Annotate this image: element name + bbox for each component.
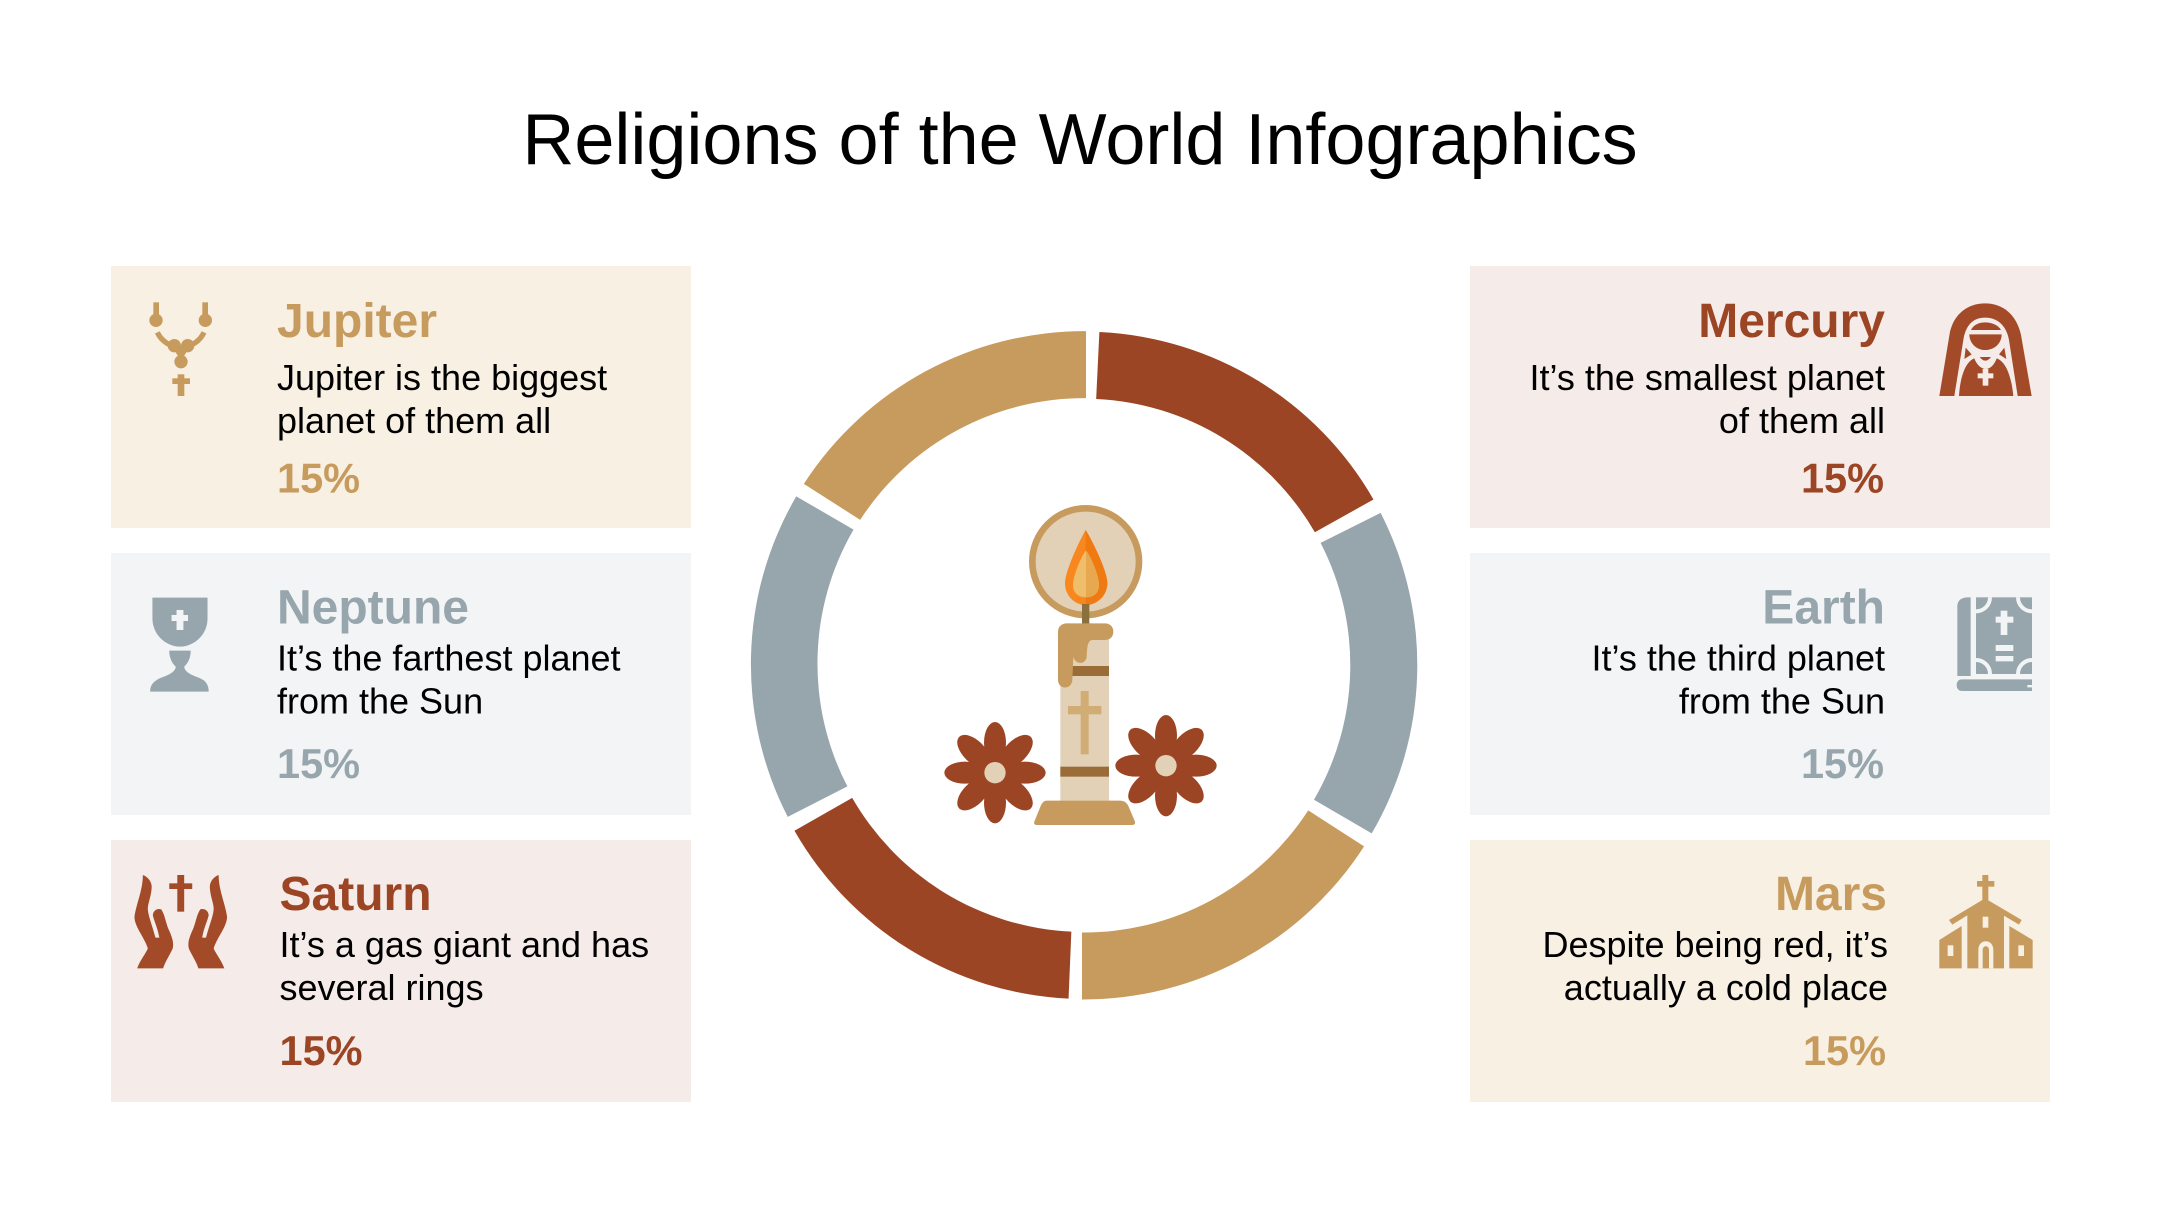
segment: gray left xyxy=(751,496,854,817)
percentage: Saturn: 15% xyxy=(280,1027,363,1074)
heading: Neptune: Neptune xyxy=(277,582,469,634)
description: Neptune: It’s the farthest planet xyxy=(277,638,621,678)
description: Saturn: It’s a gas giant and has xyxy=(280,924,649,965)
wick xyxy=(1082,604,1089,626)
heading: Mars: Mars xyxy=(1775,868,1887,921)
candle body xyxy=(1060,637,1109,801)
donut chart xyxy=(751,331,1417,999)
candle base xyxy=(1034,801,1135,825)
percentage: Jupiter: 15% xyxy=(277,454,360,502)
description: Jupiter: Jupiter is the biggest xyxy=(277,357,607,398)
halo xyxy=(1032,508,1139,615)
icon: praying hands with cross xyxy=(134,875,227,968)
percentage: Neptune: 15% xyxy=(277,740,360,787)
heading: Earth: Earth xyxy=(1762,582,1885,634)
description: Neptune: from the Sun xyxy=(277,680,483,722)
icon: candle with flowers xyxy=(944,508,1217,825)
panel: Saturn xyxy=(111,840,691,1102)
description: Earth: It’s the third planet xyxy=(1591,638,1885,678)
segment: brown top-right xyxy=(1096,332,1373,532)
icon: chalice xyxy=(150,598,209,692)
description: Mercury: of them all xyxy=(1719,400,1885,441)
panel: Earth xyxy=(1470,553,2050,815)
panel: Neptune xyxy=(111,553,691,815)
segment: brown bottom-left xyxy=(794,798,1071,999)
segment: gray right xyxy=(1314,513,1417,833)
heading: Saturn: Saturn xyxy=(280,868,432,921)
panel: Mercury xyxy=(1470,266,2050,528)
title: Religions of the World Infographics xyxy=(522,100,1638,180)
panel: Mars xyxy=(1470,840,2050,1102)
description: Earth: from the Sun xyxy=(1679,680,1885,722)
icon: nun xyxy=(1939,303,2032,396)
description: Saturn: several rings xyxy=(280,967,484,1008)
panel: Jupiter xyxy=(111,266,691,528)
description: Mars: Despite being red, it’s xyxy=(1542,924,1888,965)
flower left xyxy=(944,722,1046,823)
percentage: Mars: 15% xyxy=(1803,1027,1886,1074)
heading: Mercury: Mercury xyxy=(1698,295,1885,348)
icon: rosary xyxy=(149,302,212,396)
flower right xyxy=(1115,715,1217,816)
description: Mars: actually a cold place xyxy=(1564,967,1888,1008)
flame xyxy=(1065,530,1107,605)
icon: holy book xyxy=(1956,597,2032,691)
percentage: Earth: 15% xyxy=(1801,740,1884,787)
segment: tan top-left xyxy=(804,331,1086,520)
percentage: Mercury: 15% xyxy=(1801,454,1884,502)
segment: tan bottom-right xyxy=(1082,810,1364,999)
melted wax xyxy=(1058,623,1113,687)
icon: church xyxy=(1939,875,2033,968)
description: Mercury: It’s the smallest planet xyxy=(1529,357,1885,398)
description: Jupiter: planet of them all xyxy=(277,400,551,441)
heading: Jupiter: Jupiter xyxy=(277,295,437,348)
